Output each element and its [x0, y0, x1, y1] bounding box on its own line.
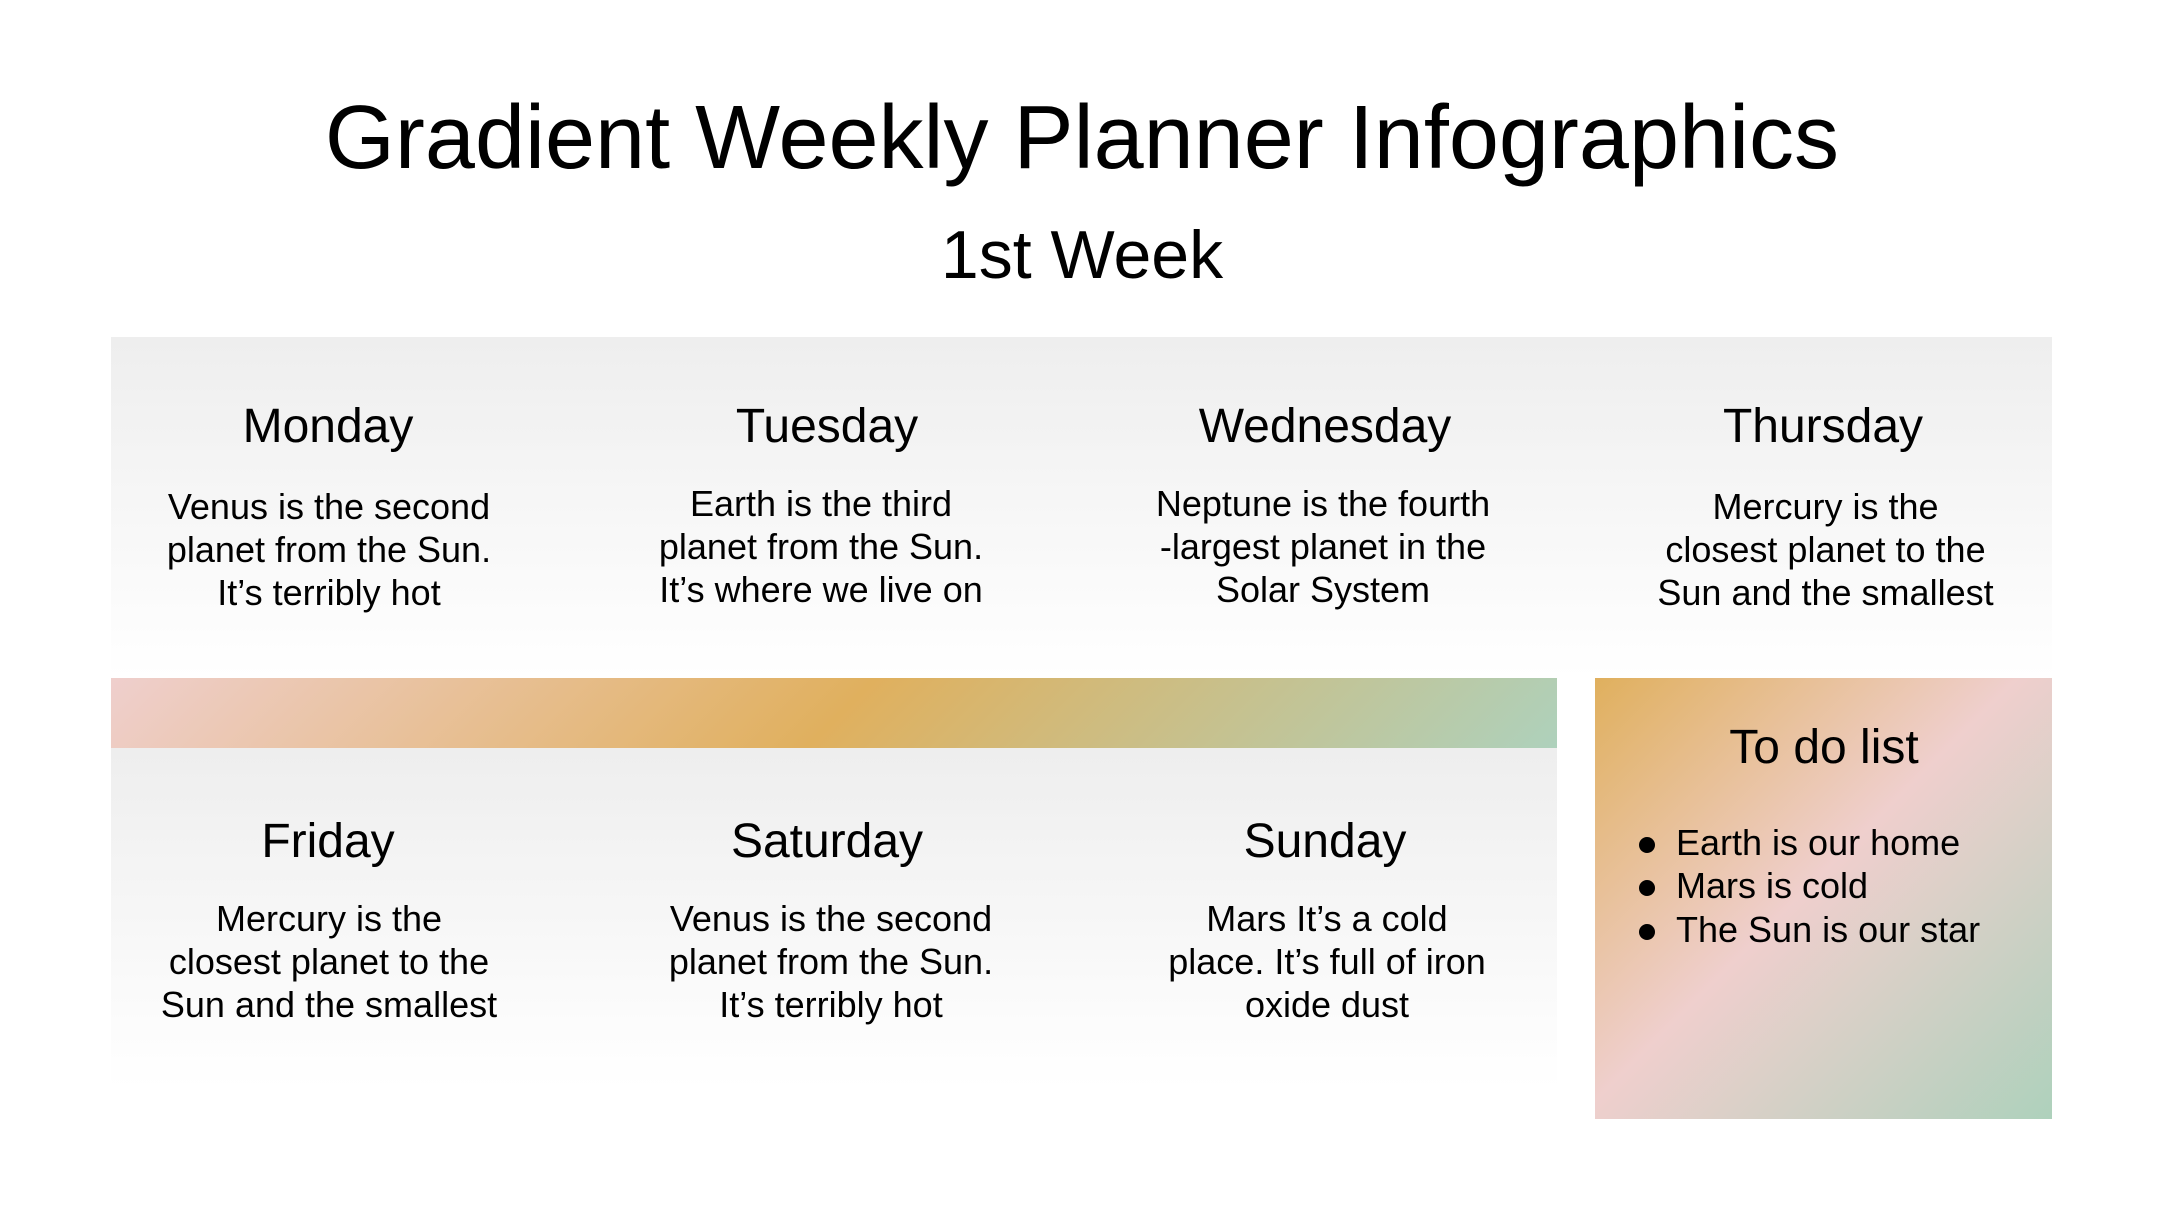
day: Sunday: place. It’s full of iron — [1168, 941, 1486, 982]
day: Saturday — [669, 815, 993, 1025]
day: Friday: closest planet to the — [169, 941, 489, 982]
panel: to do list — [1595, 678, 2052, 1119]
day: Sunday: Mars It’s a cold — [1206, 898, 1448, 939]
day: Wednesday: Neptune is the fourth — [1156, 483, 1490, 524]
day: Monday: Venus is the second — [168, 486, 490, 527]
day: Monday — [167, 400, 491, 613]
day: Tuesday: It’s where we live on — [659, 569, 983, 610]
day: Tuesday — [659, 400, 983, 610]
day: Friday: Sun and the smallest — [161, 984, 497, 1025]
title: Gradient Weekly Planner Infographics — [325, 88, 1839, 188]
day: Monday: It’s terribly hot — [217, 572, 441, 613]
day: Thursday: Sun and the smallest — [1657, 572, 1994, 613]
day: Tuesday: Earth is the third — [690, 483, 952, 524]
day: Sunday — [1168, 815, 1486, 1025]
day: Monday: planet from the Sun. — [167, 529, 491, 570]
day: Wednesday: Solar System — [1216, 569, 1430, 610]
day: Saturday: Venus is the second — [670, 898, 992, 939]
day: Thursday: Thursday — [1723, 400, 1923, 453]
to do items — [1639, 822, 1980, 950]
day: Saturday: planet from the Sun. — [669, 941, 993, 982]
day: Friday: Mercury is the — [216, 898, 442, 939]
panel: upper week background — [111, 337, 2052, 678]
day: Monday: Monday — [243, 400, 413, 453]
day: Friday: Friday — [261, 815, 395, 868]
day: Friday — [161, 815, 497, 1025]
day: Thursday: closest planet to the — [1665, 529, 1986, 570]
day: Sunday: oxide dust — [1245, 984, 1409, 1025]
day: Saturday: Saturday — [731, 815, 923, 868]
to do items: The Sun is our star — [1676, 909, 1980, 950]
day: Wednesday: -largest planet in the — [1160, 526, 1486, 567]
gradient strip — [111, 678, 1557, 748]
day: Thursday — [1657, 400, 1994, 613]
day: Wednesday: Wednesday — [1199, 400, 1451, 453]
day: Thursday: Mercury is the — [1712, 486, 1939, 527]
to do items: Earth is our home — [1676, 822, 1960, 863]
panel: lower week background — [111, 748, 1557, 1089]
day: Wednesday — [1156, 400, 1490, 610]
day: Tuesday: Tuesday — [736, 400, 918, 453]
subtitle: 1st Week — [941, 217, 1224, 293]
to do items: Mars is cold — [1676, 865, 1868, 906]
day: Sunday: Sunday — [1244, 815, 1406, 868]
day: Tuesday: planet from the Sun. — [659, 526, 983, 567]
to do heading: To do list — [1729, 721, 1919, 774]
day: Saturday: It’s terribly hot — [719, 984, 943, 1025]
